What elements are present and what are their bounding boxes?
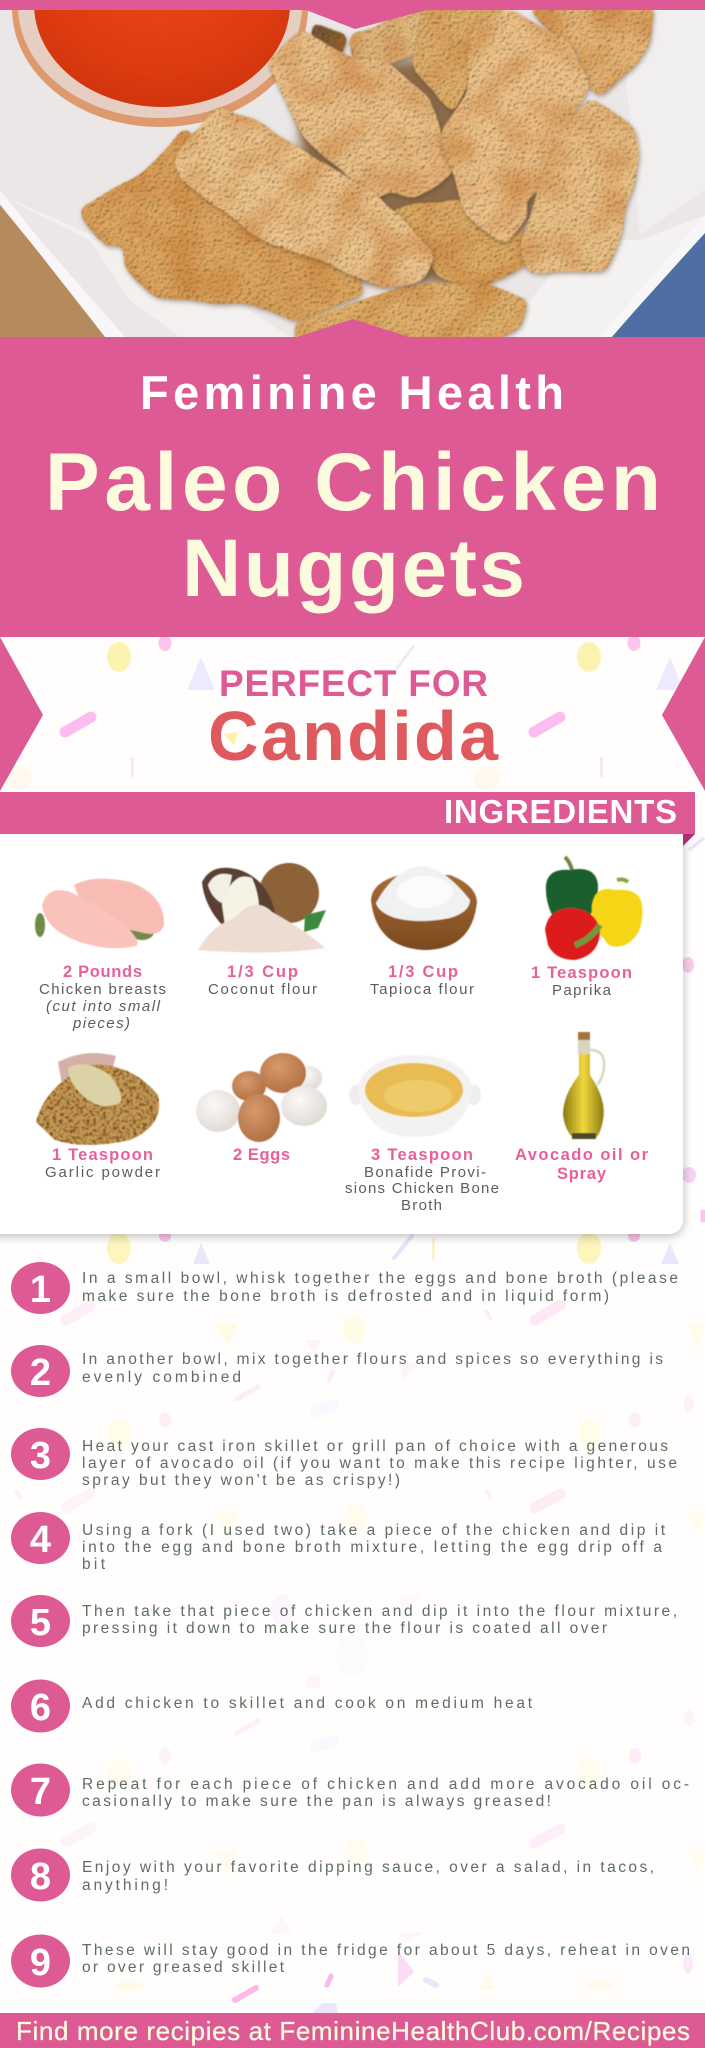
ingredient: bone broth: sions Chicken Bone <box>345 1180 499 1197</box>
ingredient: bone broth: Bonafide Provi- <box>364 1164 486 1181</box>
footer band: Find more recipies at FeminineHealthClub.com/Recipes <box>16 2016 690 2046</box>
step 6: 6 <box>30 1687 51 1729</box>
step 8: Enjoy with your favorite dipping sauce, over a salad, in tacos, <box>82 1859 654 1876</box>
ingredient: paprika peppers: Paprika <box>552 982 612 999</box>
wooden table <box>0 205 108 337</box>
ribbon tail left <box>0 637 43 791</box>
step 1: 1 <box>30 1269 51 1311</box>
step 2: In another bowl, mix together flours and spices so everything is <box>82 1351 663 1368</box>
step 3 <box>11 1428 677 1489</box>
ingredient label: 1/3 Cup <box>388 963 458 981</box>
ingredient label: Avocado oil or <box>515 1146 649 1164</box>
step 5 <box>11 1595 677 1647</box>
ingredient label: 1/3 Cup <box>227 963 298 981</box>
step 8 <box>11 1848 654 1902</box>
nuggets <box>81 6 654 347</box>
step 1: In a small bowl, whisk together the eggs and bone broth (please <box>82 1270 678 1287</box>
step 5: Then take that piece of chicken and dip it into the flour mixture, <box>82 1603 677 1620</box>
ingredient label: 3 Teaspoon <box>371 1146 473 1164</box>
step 7: Repeat for each piece of chicken and add more avocado oil oc- <box>82 1776 689 1793</box>
step 6: Add chicken to skillet and cook on medium heat <box>82 1695 533 1712</box>
ingredient: avocado oil bottle <box>515 1032 649 1183</box>
ribbon heading: PERFECT FOR <box>219 663 488 704</box>
step 4 <box>11 1512 666 1573</box>
ingredient: chicken breasts: pieces) <box>72 1015 130 1032</box>
brand heading: Feminine Health <box>140 366 564 419</box>
step 8: anything! <box>82 1877 168 1894</box>
ingredient: chicken breasts: (cut into small <box>46 998 161 1015</box>
ingredients band fold <box>683 834 695 846</box>
ingredient: bone broth: Broth <box>401 1197 442 1214</box>
step 2 <box>11 1345 663 1397</box>
step 4: 4 <box>30 1519 51 1561</box>
step 4: bit <box>82 1556 106 1573</box>
ingredient: eggs <box>196 1053 327 1164</box>
ingredient label: 1 Teaspoon <box>52 1146 153 1164</box>
step 5: pressing it down to make sure the flour is coated all over <box>82 1620 607 1637</box>
step 2: 2 <box>30 1352 51 1394</box>
step 6 <box>11 1680 533 1732</box>
ingredient: garlic powder: Garlic powder <box>45 1164 160 1181</box>
ingredient: garlic powder <box>36 1053 160 1181</box>
ingredient: tapioca flour <box>370 866 477 998</box>
ingredient label: 2 Pounds <box>63 963 142 981</box>
step 3: spray but they won’t be as crispy!) <box>82 1472 400 1489</box>
ingredient: coconut flour: Coconut flour <box>208 981 317 998</box>
top pink band with notch <box>0 0 705 29</box>
ingredient label: 2 Eggs <box>233 1146 290 1164</box>
blue cloth <box>612 230 705 337</box>
ingredient: chicken breasts: Chicken breasts <box>39 981 166 998</box>
step 9: These will stay good in the fridge for about 5 days, reheat in oven <box>82 1942 690 1959</box>
step 2: evenly combined <box>82 1369 241 1386</box>
ingredient: paprika peppers <box>531 857 642 999</box>
step 3: 3 <box>30 1435 51 1477</box>
ingredient: tapioca flour: Tapioca flour <box>370 981 474 998</box>
title line 1: Paleo Chicken <box>45 437 661 528</box>
step 7: casionally to make sure the pan is always greased! <box>82 1793 551 1810</box>
ribbon tail right <box>662 637 705 791</box>
step 7: 7 <box>30 1771 51 1813</box>
step 4: Using a fork (I used two) take a piece of the chicken and dip it <box>82 1522 666 1539</box>
ingredients card <box>0 825 683 1234</box>
ingredient label: 1 Teaspoon <box>531 964 632 982</box>
step 9 <box>11 1934 690 1988</box>
ingredient: bone broth <box>345 1055 499 1214</box>
step 5: 5 <box>30 1602 51 1644</box>
hero photo: plate of chicken nuggets with dipping sauce <box>0 0 705 347</box>
ribbon subject: Candida <box>208 697 499 775</box>
ingredient: chicken breasts <box>35 879 166 1032</box>
confetti background pattern <box>4 635 705 2013</box>
ingredient: avocado oil bottle: Spray <box>557 1165 607 1183</box>
title line 2: Nuggets <box>182 523 525 614</box>
ingredient: coconut flour <box>198 863 326 998</box>
plate and parchment paper <box>0 10 705 337</box>
step 1 <box>11 1262 678 1314</box>
step 9: 9 <box>30 1942 51 1984</box>
step 7 <box>11 1764 689 1816</box>
step 3: layer of avocado oil (if you want to make this recipe lighter, use <box>82 1455 677 1472</box>
step 9: or over greased skillet <box>82 1959 285 1976</box>
step 8: 8 <box>30 1856 51 1898</box>
step 3: Heat your cast iron skillet or grill pan of choice with a generous <box>82 1438 668 1455</box>
step 4: into the egg and bone broth mixture, letting the egg drip off a <box>82 1539 662 1556</box>
ingredients header band <box>0 792 695 834</box>
dipping sauce bowl <box>0 0 330 127</box>
ingredients header band: INGREDIENTS <box>444 793 677 830</box>
title panel <box>0 319 705 637</box>
step 1: make sure the bone broth is defrosted and in liquid form) <box>82 1288 609 1305</box>
